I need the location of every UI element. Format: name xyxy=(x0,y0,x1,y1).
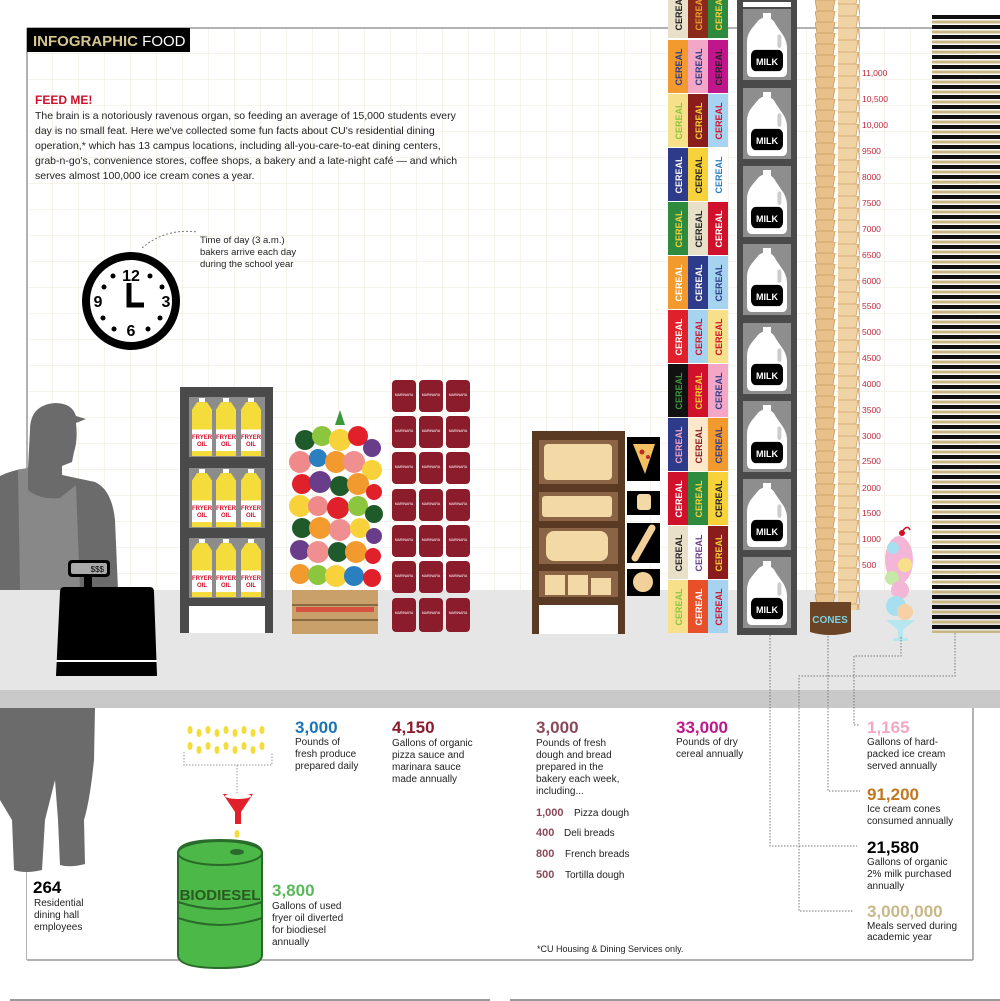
stat: milk xyxy=(867,838,951,892)
marinara cans xyxy=(392,380,470,632)
cereal column: CEREAL xyxy=(674,102,684,140)
icon: clock: 9 xyxy=(94,294,103,311)
counter xyxy=(0,590,1000,708)
marinara cans: MARINARA xyxy=(395,538,414,542)
cereal column: CEREAL xyxy=(714,264,724,302)
cereal column: CEREAL xyxy=(694,102,704,140)
cereal column: CEREAL xyxy=(674,264,684,302)
stat: bakery: Tortilla dough xyxy=(565,870,624,881)
stat: milk: 2% milk purchased xyxy=(867,869,951,880)
drops, funnel and biodiesel barrel: BIODIESEL xyxy=(180,887,260,904)
fryer oil shelf xyxy=(180,387,273,633)
icon: clock: 6 xyxy=(127,323,136,340)
scale labels: 5500 xyxy=(862,301,881,311)
cereal column: CEREAL xyxy=(694,210,704,248)
marinara cans: MARINARA xyxy=(449,574,468,578)
scale labels: 4500 xyxy=(862,353,881,363)
scale labels: 9500 xyxy=(862,146,881,156)
cereal column: CEREAL xyxy=(714,156,724,194)
cereal column: CEREAL xyxy=(694,156,704,194)
scale labels: 8000 xyxy=(862,172,881,182)
marinara cans: MARINARA xyxy=(395,502,414,506)
worker silhouette xyxy=(0,403,118,872)
fryer oil shelf: FRYER xyxy=(216,435,237,441)
marinara cans: MARINARA xyxy=(395,393,414,397)
clock caption: Time of day (3 a.m.) xyxy=(200,235,285,246)
clock caption xyxy=(200,235,296,270)
scale labels: 10,500 xyxy=(862,94,888,104)
stat: cones xyxy=(867,785,953,827)
intro text: FEED ME! xyxy=(35,93,92,107)
stat: cereal xyxy=(676,718,743,760)
fryer oil shelf: OIL xyxy=(197,583,207,589)
milk shelf: MILK xyxy=(756,527,778,537)
cereal column: CEREAL xyxy=(694,534,704,572)
stat: bakery: French breads xyxy=(565,849,629,860)
scale labels: 3000 xyxy=(862,431,881,441)
cereal column: CEREAL xyxy=(714,318,724,356)
stat: bakery: prepared in the xyxy=(536,762,604,773)
marinara cans: MARINARA xyxy=(395,429,414,433)
milk shelf: MILK xyxy=(756,371,778,381)
cereal column: CEREAL xyxy=(674,480,684,518)
scale labels: 2500 xyxy=(862,456,881,466)
stat: cereal: cereal annually xyxy=(676,749,743,760)
fryer oil shelf: OIL xyxy=(221,583,231,589)
marinara cans: MARINARA xyxy=(422,393,441,397)
scale labels: 5000 xyxy=(862,327,881,337)
marinara cans: MARINARA xyxy=(422,429,441,433)
bakery shelf xyxy=(532,431,660,634)
stat: biodiesel: for biodiesel xyxy=(272,925,326,936)
stat: employees xyxy=(33,878,83,933)
cash register xyxy=(56,560,157,676)
stat: cones: Ice cream cones xyxy=(867,804,940,815)
title: INFOGRAPHIC FOOD xyxy=(33,33,186,50)
stat: biodiesel: annually xyxy=(272,937,309,948)
scale labels: 500 xyxy=(862,560,876,570)
marinara cans: MARINARA xyxy=(422,465,441,469)
cash register: $$$ xyxy=(91,565,105,574)
stat: sauce: pizza sauce and xyxy=(392,750,464,761)
stat: biodiesel: 3,800 xyxy=(272,881,315,900)
stat: bakery: 500 xyxy=(536,869,554,881)
stat: bakery: Pizza dough xyxy=(574,808,629,819)
scale labels: 2000 xyxy=(862,483,881,493)
stat: employees: Residential xyxy=(34,898,83,909)
scale labels: 1500 xyxy=(862,508,881,518)
cereal column: CEREAL xyxy=(714,480,724,518)
cereal column: CEREAL xyxy=(694,48,704,86)
cereal column: CEREAL xyxy=(694,588,704,626)
fryer oil shelf: OIL xyxy=(197,442,207,448)
stat: milk: Gallons of organic xyxy=(867,857,948,868)
scale labels: 11,000 xyxy=(862,68,888,78)
stat: bakery: dough and bread xyxy=(536,750,612,761)
stat: bakery: 3,000 xyxy=(536,718,579,737)
marinara cans: MARINARA xyxy=(395,574,414,578)
icon: clock xyxy=(86,231,198,346)
stat: ice cream: packed ice cream xyxy=(867,749,945,760)
fryer oil shelf: OIL xyxy=(246,513,256,519)
stat: meals xyxy=(867,902,957,943)
marinara cans: MARINARA xyxy=(422,574,441,578)
stat: bakery: 400 xyxy=(536,827,554,839)
stat: bakery: Pounds of fresh xyxy=(536,738,606,749)
cereal column: CEREAL xyxy=(714,102,724,140)
stat: employees: dining hall xyxy=(34,910,79,921)
fryer oil shelf: FRYER xyxy=(241,506,262,512)
cereal column: CEREAL xyxy=(694,372,704,410)
scale labels: 3500 xyxy=(862,405,881,415)
stat: produce: prepared daily xyxy=(295,761,358,772)
scale labels: 7500 xyxy=(862,198,881,208)
stat: bakery xyxy=(536,718,629,881)
stat: sauce: made annually xyxy=(392,774,457,785)
marinara cans: MARINARA xyxy=(449,611,468,615)
cereal column: CEREAL xyxy=(714,426,724,464)
cereal column: CEREAL xyxy=(674,318,684,356)
stat: cereal: 33,000 xyxy=(676,718,728,737)
stat: cereal: Pounds of dry xyxy=(676,737,738,748)
cereal column: CEREAL xyxy=(674,156,684,194)
fryer oil shelf: OIL xyxy=(221,513,231,519)
footnote: *CU Housing & Dining Services only. xyxy=(537,944,683,954)
stat: produce: fresh produce xyxy=(295,749,357,760)
stat: sauce xyxy=(392,718,473,785)
stat: meals: Meals served during xyxy=(867,921,957,932)
fryer oil shelf: OIL xyxy=(246,583,256,589)
marinara cans: MARINARA xyxy=(395,465,414,469)
milk shelf: MILK xyxy=(756,449,778,459)
fryer oil shelf: FRYER xyxy=(241,576,262,582)
background grid xyxy=(27,28,977,590)
stat: sauce: Gallons of organic xyxy=(392,738,473,749)
cereal column: CEREAL xyxy=(714,588,724,626)
fryer oil shelf: FRYER xyxy=(192,435,213,441)
cereal column: CEREAL xyxy=(714,48,724,86)
cereal column: CEREAL xyxy=(674,210,684,248)
marinara cans: MARINARA xyxy=(422,538,441,542)
scale labels: 10,000 xyxy=(862,120,888,130)
stat: meals: 3,000,000 xyxy=(867,902,943,921)
striped meals bar xyxy=(932,15,1000,633)
intro text: grab-n-go's, convenience stores, coffee shops, a bakery and a late-night café — and which xyxy=(35,155,457,167)
title xyxy=(27,28,190,52)
intro text xyxy=(35,93,457,182)
stat: bakery: Deli breads xyxy=(564,828,615,839)
clock caption: bakers arrive each day xyxy=(200,247,296,258)
milk shelf: MILK xyxy=(756,605,778,615)
stat: cones: 91,200 xyxy=(867,785,919,804)
stat: ice cream xyxy=(867,718,945,772)
cereal column: CEREAL xyxy=(674,588,684,626)
stat: ice cream: 1,165 xyxy=(867,718,910,737)
stat: employees: 264 xyxy=(33,878,62,897)
icon: clock: 12 xyxy=(122,268,140,285)
marinara cans: MARINARA xyxy=(449,502,468,506)
scale labels xyxy=(862,68,888,570)
intro text: operation,* which has 13 campus locations, including all-you-care-to-eat dining centers, xyxy=(35,140,441,152)
milk shelf: MILK xyxy=(756,136,778,146)
fryer oil shelf: FRYER xyxy=(216,576,237,582)
marinara cans: MARINARA xyxy=(449,465,468,469)
drops, funnel and biodiesel barrel xyxy=(178,726,272,968)
fryer oil shelf: FRYER xyxy=(216,506,237,512)
stat: bakery: bakery each week, xyxy=(536,774,619,785)
connector lines xyxy=(770,633,955,911)
scale labels: 6500 xyxy=(862,250,881,260)
clock caption: during the school year xyxy=(200,259,293,270)
sundae xyxy=(885,527,915,641)
produce pile with crate xyxy=(289,410,383,634)
cereal column: CEREAL xyxy=(674,48,684,86)
stat: ice cream: served annually xyxy=(867,761,937,772)
ice cream cone stacks xyxy=(810,0,860,635)
intro text: serves almost 100,000 ice cream cones a year. xyxy=(35,170,254,182)
marinara cans: MARINARA xyxy=(449,538,468,542)
cereal column: CEREAL xyxy=(694,318,704,356)
cereal column: CEREAL xyxy=(694,426,704,464)
cereal column xyxy=(668,0,728,633)
stat: cones: consumed annually xyxy=(867,816,953,827)
cereal column: CEREAL xyxy=(714,372,724,410)
cereal column: CEREAL xyxy=(714,534,724,572)
ice cream cone stacks: CONES xyxy=(812,615,848,626)
stat: ice cream: Gallons of hard- xyxy=(867,737,938,748)
marinara cans: MARINARA xyxy=(395,611,414,615)
scale labels: 6000 xyxy=(862,276,881,286)
milk shelf: MILK xyxy=(756,214,778,224)
cereal column: CEREAL xyxy=(714,210,724,248)
stat: bakery: 1,000 xyxy=(536,807,564,819)
fryer oil shelf: OIL xyxy=(221,442,231,448)
milk shelf xyxy=(737,0,797,635)
stat: produce: Pounds of xyxy=(295,737,340,748)
marinara cans: MARINARA xyxy=(422,611,441,615)
cereal column: CEREAL xyxy=(694,264,704,302)
cereal column: CEREAL xyxy=(694,480,704,518)
milk shelf: MILK xyxy=(756,57,778,67)
stat: sauce: 4,150 xyxy=(392,718,435,737)
stat: bakery: including... xyxy=(536,786,584,797)
intro text: day is no small feat. Here we've collected some fun facts about CU's residential dining xyxy=(35,125,435,137)
stat: meals: academic year xyxy=(867,932,933,943)
stat: sauce: marinara sauce xyxy=(392,762,461,773)
stat: bakery: 800 xyxy=(536,848,554,860)
stat: biodiesel xyxy=(272,881,343,948)
fryer oil shelf: FRYER xyxy=(241,435,262,441)
cereal column: CEREAL xyxy=(674,534,684,572)
stat: milk: 21,580 xyxy=(867,838,919,857)
marinara cans: MARINARA xyxy=(449,393,468,397)
fryer oil shelf: FRYER xyxy=(192,506,213,512)
fryer oil shelf: OIL xyxy=(197,513,207,519)
icon: clock: 3 xyxy=(162,294,171,311)
stat: employees: employees xyxy=(34,922,82,933)
stat: produce: 3,000 xyxy=(295,718,338,737)
cereal column: CEREAL xyxy=(674,372,684,410)
marinara cans: MARINARA xyxy=(449,429,468,433)
stat: milk: annually xyxy=(867,881,904,892)
stat: biodiesel: fryer oil diverted xyxy=(272,913,343,924)
fryer oil shelf: OIL xyxy=(246,442,256,448)
fryer oil shelf: FRYER xyxy=(192,576,213,582)
scale labels: 7000 xyxy=(862,224,881,234)
stat: biodiesel: Gallons of used xyxy=(272,901,342,912)
cereal column: CEREAL xyxy=(674,426,684,464)
marinara cans: MARINARA xyxy=(422,502,441,506)
scale labels: 4000 xyxy=(862,379,881,389)
milk shelf: MILK xyxy=(756,292,778,302)
intro text: The brain is a notoriously ravenous organ, so feeding an average of 15,000 students every xyxy=(35,110,457,122)
bottom panel xyxy=(27,708,973,960)
stat: produce xyxy=(295,718,358,772)
scale labels: 1000 xyxy=(862,534,881,544)
